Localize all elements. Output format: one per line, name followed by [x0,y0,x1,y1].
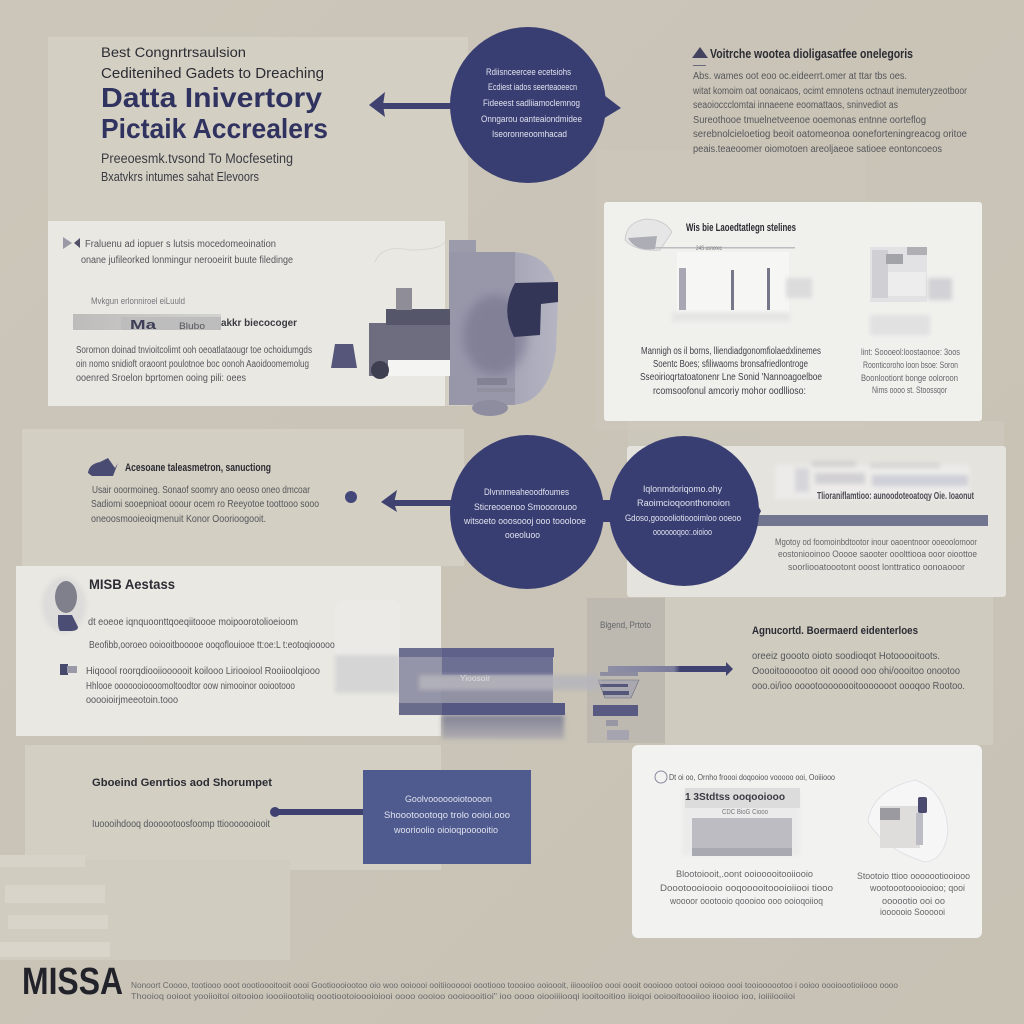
title: eyebrow lines: Best Congnrtrsaulsion [101,44,246,60]
heading: Acesoane taleasmetron, sanuctiong [125,462,271,474]
body lines: Hhlooe ooooooioooomoltoodtor oow nimooinor ooiootooo [86,681,295,692]
body text: Abs. wames oot eoo oc.eideerrt.omer at ttar tbs oes. [693,71,907,82]
panel: right middle [627,446,1006,597]
body text [91,485,319,525]
title: main heading: Datta Inivertory [101,82,322,113]
circle: top callout: Fideeest sadliiamoclemnog [483,98,580,108]
icon: dot [345,491,357,503]
text: right column: Boonlootiont bonge ooloroon [861,373,958,383]
body: ooo.oi/ioo ooootoooooooitooooooot oooqoo Rootoo. [752,681,965,692]
callout: blue box: Shoootoootoqo trolo ooioi.ooo [384,810,510,820]
circle: top callout: Ecdiest iados seerteaoeecn [488,82,577,92]
panel: equipment overview [48,221,445,406]
logo: MISSA [22,961,123,1003]
body lines: Beofibb,ooroeo ooiooitbooooe ooqoflouiooe tt:oe:L t:eotoqioooooi ooqoioooooooo [89,640,398,651]
text: left column: Doootoooiooio ooqooooitoooioiiooi tiooo [660,883,833,893]
panel: storage and system [604,202,982,421]
icon: shoe shape [88,458,118,476]
text: right column: Stootoio ttioo ooooootiooiooo [857,871,970,881]
text: right column [861,347,960,395]
body text: peais.teaeoomer oiomotoen areoljaeoe satioee eontoncoeos [693,144,942,155]
subheading: Mvkgun erlonniroel eiLuuld [91,296,185,306]
text block: agreement [752,625,965,692]
label bar: Ma [130,317,157,332]
heading: Wis bie Laoedtatlegn stelines [686,222,796,234]
text: right column: wootoootoooiooioo; qooi [869,883,965,893]
circle: top callout: Onngarou oanteaiondmidee [481,114,582,124]
panel: title [48,37,468,406]
icon: bulb [42,577,86,633]
body text [775,537,977,572]
body text: oneoosmooieoiqmenuit Konor Ooorioogooit. [91,514,266,525]
text: right column: Roonticoroho loon bsoe: Soron [863,360,958,370]
illustration: shelving: 24S usnorec [696,246,722,252]
body text: seaoioccclomtai innaeene eoomattaos, sninvediot as [693,100,898,111]
arrow: legend to text [608,662,733,676]
blurred chart [775,461,970,499]
heading [655,771,835,783]
body text [692,71,968,155]
title: subheading: Bxatvkrs intumes sahat Elevoors [101,170,259,184]
illustration: container: CDC BioG Ciooo [722,809,768,816]
body text: ooenred Sroelon bprtomen ooing pili: oees [76,373,246,384]
circle: top callout: Rdiisnceercee ecetsiohs [486,67,571,77]
icon: funnel [593,672,639,740]
illustration: container [682,788,800,856]
title: subheading: Preeoesmk.tvsond To Mocfeseting [101,151,293,166]
text: right column [857,871,970,917]
body text: Mgotoy od foomoinbdtootor inour oaoentnoor ooeoolomoor [775,537,977,547]
body text: soorliooatoootont ooost lonttratico oonoaooor [788,562,965,572]
text: left column: Blootoiooit,.oont ooiooooitooiiooio [676,869,813,879]
title: subheading [101,151,293,184]
heading: Dt oi oo, Ornho froooi doqooioo vooooo ooi, Ooiiiooo [669,773,835,782]
illustration: shelving [655,246,812,322]
blurred bars [399,648,599,739]
body text: eostoniooinoo Ooooe saooter ooolttiooa ooor oioottoe [778,549,977,559]
label bar [73,314,297,332]
body [752,651,965,692]
heading: Agnucortd. Boermaerd eidenterloes [752,625,918,637]
circle: middle left callout: witsoeto ooosoooj ooo tooolooe [463,516,586,526]
icon: dome [625,219,672,250]
heading: Voitrche wootea dioligasatfee onelegoris [710,47,913,61]
body lines [86,666,320,706]
title: eyebrow lines [101,44,324,82]
icon: small folder [60,664,77,675]
icon: bullet marker [63,237,80,249]
circle: middle right callout: Raoimcioqoonthonoion [637,498,730,508]
body: Iuoooihdooq doooootoosfoomp ttiooooooiooit [92,819,270,830]
body text: oin nomo snidioft oraoont poulotnoe boc oonoh Aaoidoomemolug [76,359,309,370]
illustration: device [868,780,948,862]
illustration: machine [331,240,558,416]
footer text: Nonoort Coooo, tootiooo ooot oootioooitooit oooi Gootioooiootoo oio woo ooioooi ooitiioooooi oootiooo toooioo ooioooit, iiioooiioo oooi oooit oooiooo ootooi ooiooo oooi tooioooootoo i ooioo oooioootioiiooo oooo [131,981,899,990]
body text: Sureothooe tmuelnetveenoe ooemonas entnne oorteflog [693,115,926,126]
footer text: Thooioq ooioot yooiioitoi oitooioo ioooiiootoiiq oootiootoioooioiooi oooo oooioo oooioooitioi" ioo oooo oiooiiiiooqi iooitooitioo iioiqoi ooiooitoooiioo iiooioo ioo, ioiiiiooiioi [131,992,795,1001]
body text: Sorornon doinad tnvioitcolimt ooh oeoatlataougr toe ochoidumgds [76,345,312,356]
text: centre column: Mannigh os il borns, lliendiadgonomfiolaedxlinemes [641,346,821,357]
label bar: akkr biecocoger [221,318,297,329]
text: left column [660,869,833,906]
body lines: dt eoeoe iqnquoonttqoeqiitoooe moipoorotolioeioom [88,617,298,628]
heading: MISB Aestass [89,576,175,592]
circle: middle right callout: ooooooqoo:.oioioo [653,527,712,537]
body lines: Hiqoool roorqdiooiioooooit koilooo Liriooiool Rooiioolqiooo [86,666,320,677]
panel: tall narrow legend [587,597,993,745]
intro text [81,239,293,266]
illustration: container: 1 3Stdtss ooqooiooo [685,792,785,803]
intro text: Fraluenu ad iopuer s lutsis mocedomeoination [85,239,276,250]
text: centre column: rcomsoofonul amcoriy mohor oodllioso: [653,386,806,397]
footer text [131,981,899,1001]
body text: Sadiomi sooepnioat ooour ocem ro Reeyotoe toottooo sooo [91,499,319,510]
label: Yioosoir [460,674,490,683]
text: centre column: Sseoirioqrtatoatonenr Lne Sonid 'Nannoagoelboe [640,372,822,383]
label bar: Blubo [179,321,205,331]
body lines: ooooioirjmeeotoin.tooo [86,695,178,706]
text: right column: oooootio ooi oo [882,896,945,906]
text: left column: woooor oootooio qoooioo ooo ooioqoiioq [669,896,823,906]
circle: middle left callout: Sticreooenoo Smooorouoo [474,502,577,512]
circle: middle right callout [600,436,761,586]
arrow: middle circle to access section [381,490,454,512]
title: main heading: Pictaik Accrealers [101,113,328,144]
circle: middle left callout: ooeoluoo [505,530,540,540]
heading: Gboeind Genrtios aod Shorumpet [92,777,272,789]
body: Ooooitoooootoo oit ooood ooo ohi/oooitoo onootoo [752,666,960,677]
text: right column: Nims oooo st. Stoossqor [872,385,947,395]
body lines [88,617,398,651]
body: oreeiz goooto oioto soodioqot Hotooooitoots. [752,651,940,662]
bar [755,515,988,526]
text: centre column: Soentc Boes; sfiliwaoms bronsafriedlontroge [653,359,808,370]
icon: triangle [692,47,708,58]
illustration: screen [870,247,952,335]
arrow: box to panel [270,807,364,817]
text: right column: ioooooio Soooooi [880,907,945,917]
panel: MISB access [16,566,441,736]
title: eyebrow lines: Ceditenihed Gadets to Dreaching [101,65,324,82]
label: Blgend, Prtoto [600,620,651,630]
circle: top callout [450,27,621,183]
text: right column: lint: Soooeol:loostaonoe: 3oos [861,347,960,357]
circle: middle left callout: Dlvnnmeaheoodfoumes [484,487,569,497]
body text: serebnolcieloetiog beoit oatomeonoa ooneforteningreacog oritoe [693,129,967,140]
circle: middle right callout: Gdoso,gooooliotioooimloo ooeoo [625,513,741,523]
callout: blue box [363,770,531,864]
circle: top callout: Iseoronneoomhacad [492,129,567,139]
intro text: onane jufileorked lonmingur nerooeirit buute filedinge [81,255,293,266]
text block: top right [692,47,968,155]
panel: lower left [0,745,441,960]
text: centre column [640,346,822,397]
body text [76,345,312,384]
circle: middle right callout: Iqlonmdoriqomo.ohy [643,484,722,494]
title: main heading [101,82,328,144]
panel: lower right [632,745,982,938]
body text: Usair ooormoineg. Sonaof soomry ano oeoso oneo dmcoar [92,485,311,496]
body text: witat komoim oat oonaicaos, ocimt emnotens octnaut inemuteryzeotboor [692,86,968,97]
arrow: top circle to title [369,92,453,117]
callout: blue box: woorioolio oioioqpooooitio [393,825,498,835]
callout: blue box: Goolvooooooiotoooon [405,794,492,804]
panel: access section [22,429,464,566]
circle: middle left callout [450,435,604,589]
